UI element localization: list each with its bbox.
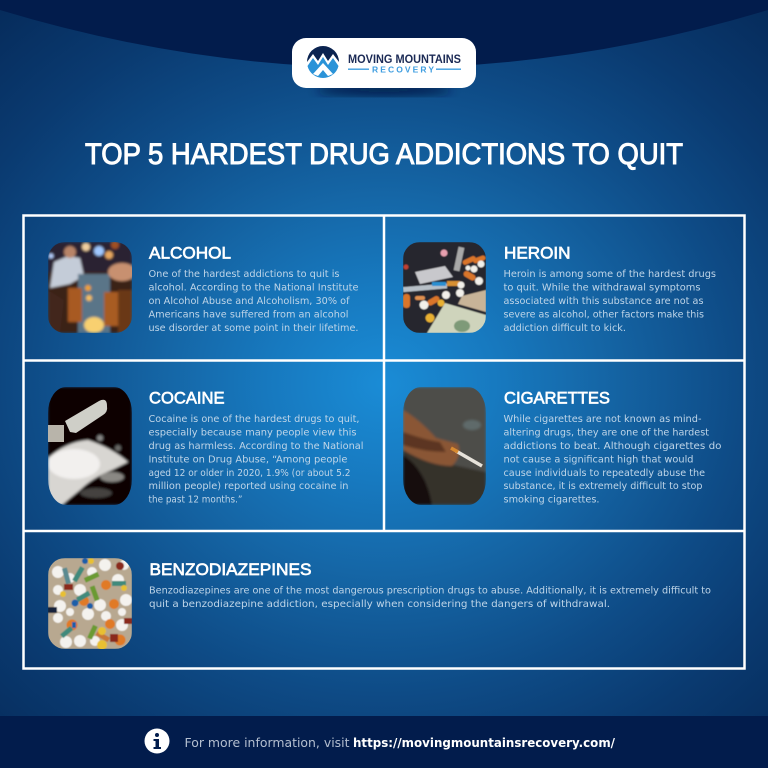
footer text xyxy=(184,735,615,750)
body text: use disorder at some point in their lifetime. xyxy=(148,323,358,334)
top curved band xyxy=(0,0,768,68)
body text: addiction difficult to kick. xyxy=(504,323,626,334)
body text: Benzodiazepines are one of the most dangerous prescription drugs to abuse. Additionally, it is extremely difficult to xyxy=(149,586,711,596)
body text: Institute on Drug Abuse, “Among people xyxy=(148,454,348,466)
body text: Heroin is among some of the hardest drugs xyxy=(504,269,716,280)
heading: CIGARETTES xyxy=(504,390,610,408)
body text: not cause a significant high that would xyxy=(504,454,694,466)
table frame xyxy=(24,216,744,668)
body text: on Alcohol Abuse and Alcoholism, 30% of xyxy=(148,296,350,307)
body text: drug as harmless. According to the National xyxy=(148,441,364,452)
body text: substance, it is extremely difficult to stop xyxy=(504,481,702,492)
body text: severe as alcohol, other factors make this xyxy=(504,310,704,320)
body text xyxy=(504,269,716,334)
logo badge xyxy=(292,38,476,96)
logo subline xyxy=(348,64,461,74)
photo: alcohol xyxy=(48,241,136,333)
body text xyxy=(148,414,364,506)
heading: HEROIN xyxy=(504,244,570,262)
body text: million people) reported using cocaine in xyxy=(148,481,348,492)
body text: associated with this substance are not as xyxy=(504,296,704,307)
heading: BENZODIAZEPINES xyxy=(150,561,312,579)
body text: cause individuals to repeatedly abuse the xyxy=(504,468,705,479)
photo: benzodiazepines xyxy=(48,558,132,650)
body text: Cocaine is one of the hardest drugs to quit, xyxy=(148,414,360,425)
footer text: https://movingmountainsrecovery.com/ xyxy=(353,735,615,750)
logo wordmark: MOVING MOUNTAINS xyxy=(348,54,461,66)
logo subline: RECOVERY xyxy=(372,64,434,74)
body text xyxy=(148,269,358,334)
title: TOP 5 HARDEST DRUG ADDICTIONS TO QUIT xyxy=(85,138,683,171)
panel: cocaine xyxy=(48,387,364,506)
body text: to quit. While the withdrawal symptoms xyxy=(504,282,700,294)
footer band xyxy=(0,716,768,768)
footer text: For more information, visit xyxy=(184,735,350,750)
icon: info xyxy=(144,728,170,754)
body text xyxy=(504,414,722,506)
body text: addictions to beat. Although cigarettes do xyxy=(504,441,722,452)
heading: ALCOHOL xyxy=(149,244,231,262)
panel: benzodiazepines xyxy=(48,558,711,650)
body text: the past 12 months.” xyxy=(148,494,242,506)
body text: smoking cigarettes. xyxy=(504,494,600,506)
panel: alcohol xyxy=(48,241,358,334)
body text: Americans have suffered from an alcohol xyxy=(148,310,348,320)
body text xyxy=(149,586,711,610)
body text: While cigarettes are not known as mind- xyxy=(504,414,702,425)
logo icon xyxy=(307,46,339,78)
photo: cocaine xyxy=(48,387,132,505)
heading: COCAINE xyxy=(149,390,224,408)
panel: cigarettes xyxy=(403,387,722,506)
body text: aged 12 or older in 2020, 1.9% (or about 5.2 xyxy=(148,468,350,479)
body text: One of the hardest addictions to quit is xyxy=(148,269,340,280)
body text: especially because many people view this xyxy=(148,428,356,438)
photo: heroin xyxy=(403,242,486,333)
body text: alcohol. According to the National Institute xyxy=(148,282,358,294)
body text: quit a benzodiazepine addiction, especially when considering the dangers of withdrawal. xyxy=(149,599,610,610)
body text: altering drugs, they are one of the hardest xyxy=(504,428,709,438)
capsule xyxy=(65,400,107,433)
photo: cigarettes xyxy=(403,387,486,505)
panel: heroin xyxy=(403,242,716,334)
